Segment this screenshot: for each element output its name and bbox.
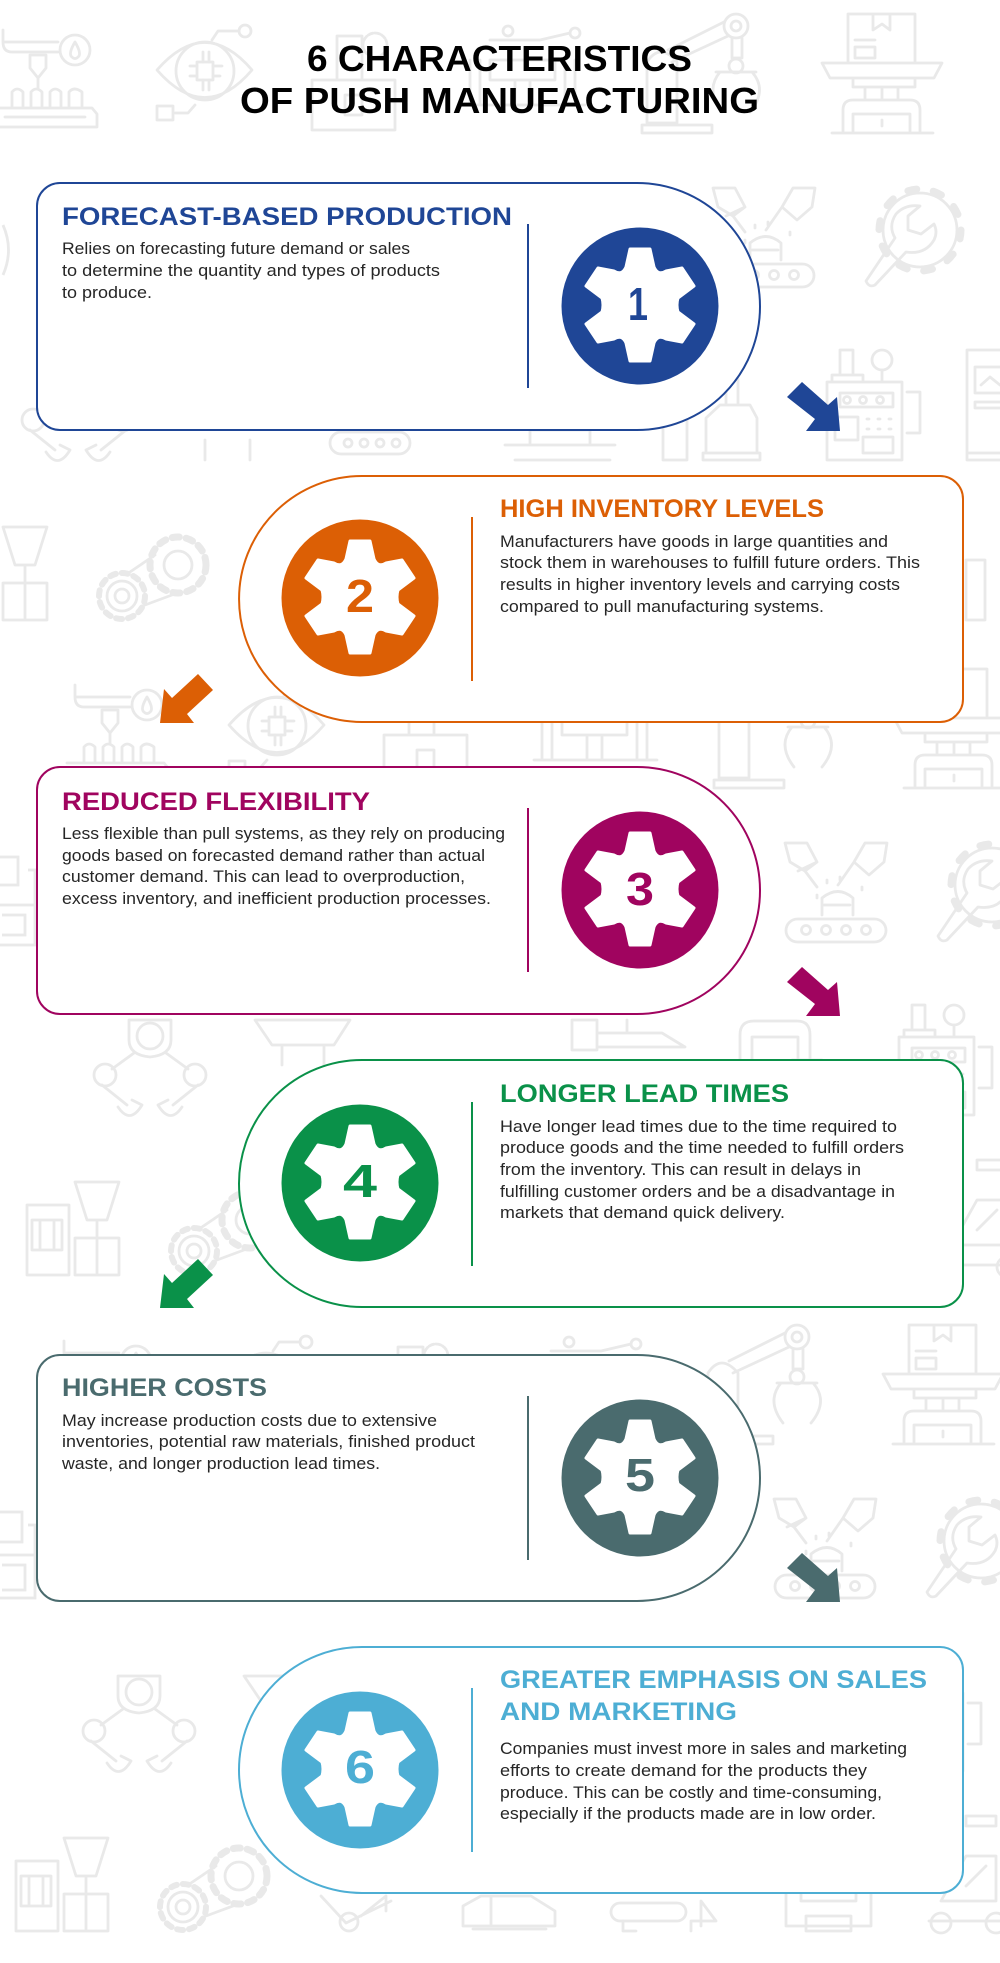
panel: longer lead times (239, 1060, 963, 1307)
text block: longer lead times: markets that demand quick delivery. (500, 1204, 785, 1222)
text block: reduced flexibility: Less flexible than pull systems, as they rely on producing (62, 825, 505, 843)
heading: reduced flexibility: REDUCED FLEXIBILITY (62, 788, 370, 816)
panel: reduced flexibility (37, 767, 760, 1014)
heading: high inventory levels: HIGH INVENTORY LEVELS (500, 495, 824, 523)
text block: high inventory levels (500, 533, 920, 616)
text block: greater emphasis on sales and marketing: efforts to create demand for the products they (500, 1762, 868, 1780)
text block: forecast-based production: to determine the quantity and types of products (62, 262, 440, 280)
text block: greater emphasis on sales and marketing: produce. This can be costly and time-consuming, (500, 1784, 882, 1802)
text block: reduced flexibility: goods based on forecasted demand rather than actual (62, 847, 485, 865)
text block: longer lead times: Have longer lead times due to the time required to (500, 1118, 897, 1136)
text block: longer lead times: produce goods and the time needed to fulfill orders (500, 1139, 904, 1157)
icon: gear number 5 (562, 1400, 718, 1556)
arrow: 3 to 4 (787, 967, 840, 1016)
text block: high inventory levels: results in higher inventory levels and carrying costs (500, 576, 900, 594)
text block: higher costs: waste, and longer production lead times. (61, 1455, 380, 1473)
text block: greater emphasis on sales and marketing: especially if the products made are in low order. (500, 1805, 876, 1823)
text block: higher costs: May increase production costs due to extensive (62, 1412, 437, 1430)
icon: gear number 1 (562, 228, 718, 384)
panel: greater emphasis on sales and marketing (239, 1647, 963, 1893)
icon: gear number 2: 2 (346, 570, 374, 622)
heading: greater emphasis on sales and marketing: GREATER EMPHASIS ON SALES (500, 1666, 927, 1694)
icon: gear number 3: 3 (626, 863, 654, 915)
icon: gear number 1: 1 (628, 278, 648, 330)
icon: gear number 6: 6 (345, 1741, 375, 1793)
text block: greater emphasis on sales and marketing: Companies must invest more in sales and marketing (500, 1740, 907, 1758)
title: OF PUSH MANUFACTURING (240, 80, 759, 121)
text block: reduced flexibility: customer demand. This can lead to overproduction, (62, 868, 465, 886)
text block: high inventory levels: Manufacturers have goods in large quantities and (500, 533, 888, 551)
text block: longer lead times: fulfilling customer orders and be a disadvantage in (500, 1183, 895, 1201)
text block: greater emphasis on sales and marketing (500, 1740, 907, 1823)
arrow: 2 to 3 (160, 674, 213, 723)
text block: forecast-based production: Relies on forecasting future demand or sales (62, 240, 410, 258)
heading: greater emphasis on sales and marketing (500, 1666, 927, 1726)
arrow: 1 to 2 (787, 382, 840, 431)
heading: greater emphasis on sales and marketing: AND MARKETING (500, 1698, 737, 1726)
icon: gear number 6 (282, 1692, 438, 1848)
icon: gear number 4 (282, 1104, 438, 1262)
heading: longer lead times: LONGER LEAD TIMES (500, 1080, 789, 1108)
heading: forecast-based production: FORECAST-BASED PRODUCTION (62, 203, 512, 231)
panel: forecast-based production (37, 183, 760, 430)
panel: higher costs (37, 1355, 760, 1601)
text block: forecast-based production (62, 240, 440, 302)
arrow: 5 to 6 (787, 1553, 840, 1602)
text block: longer lead times (500, 1118, 904, 1222)
icon: gear number 2 (282, 520, 438, 676)
title: 6 CHARACTERISTICS (307, 38, 692, 79)
icon: gear number 5: 5 (625, 1449, 655, 1501)
icon: gear number 4: 4 (343, 1155, 378, 1207)
text block: high inventory levels: stock them in warehouses to fulfill future orders. This (500, 554, 920, 572)
text block: longer lead times: from the inventory. This can result in delays in (500, 1161, 861, 1179)
arrow: 4 to 5 (160, 1259, 213, 1308)
text block: higher costs (61, 1412, 475, 1473)
title (240, 38, 759, 121)
heading: higher costs: HIGHER COSTS (62, 1374, 267, 1402)
text block: forecast-based production: to produce. (62, 284, 152, 302)
icon: gear number 3 (562, 812, 718, 968)
text block: reduced flexibility (62, 825, 505, 908)
text block: higher costs: inventories, potential raw materials, finished product (62, 1433, 475, 1451)
panel: high inventory levels (239, 476, 963, 722)
text block: high inventory levels: compared to pull manufacturing systems. (500, 598, 824, 616)
text block: reduced flexibility: excess inventory, and inefficient production processes. (62, 890, 491, 908)
